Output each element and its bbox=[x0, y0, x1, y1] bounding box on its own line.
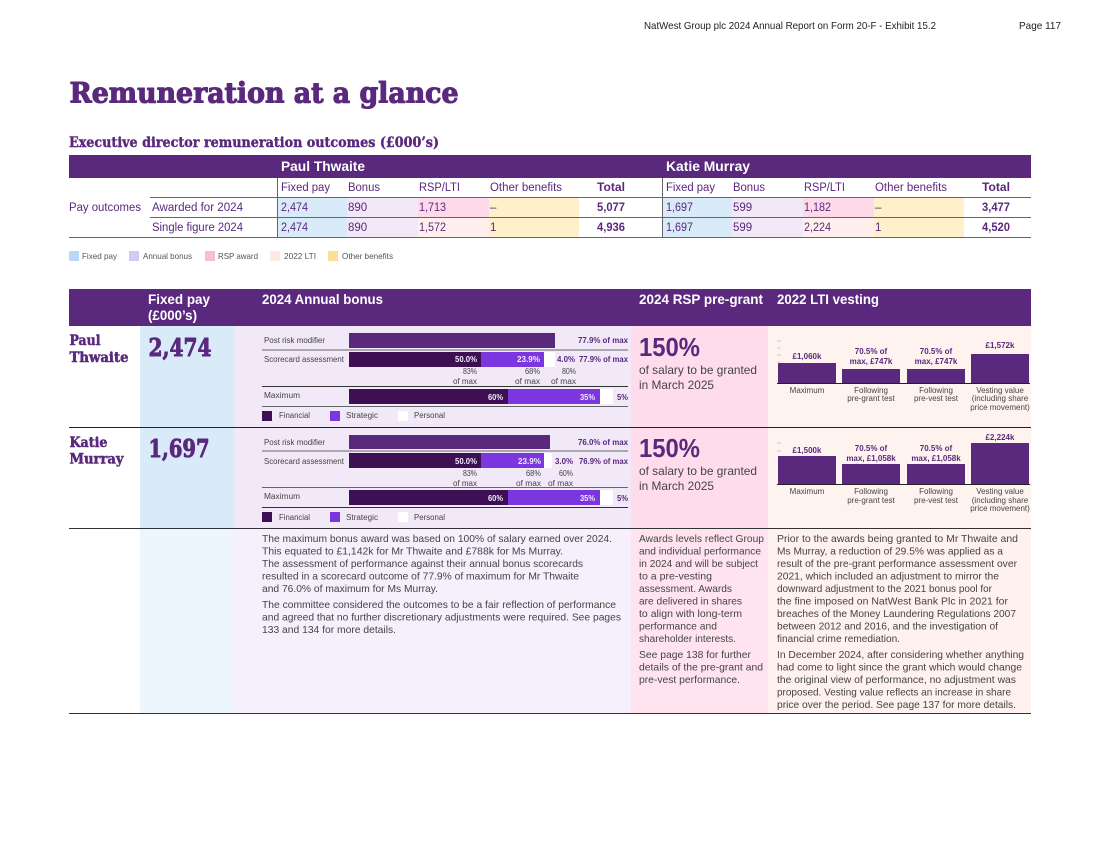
text block: LTI commentary: In December 2024, after considering whether anything bbox=[777, 649, 1024, 661]
column group: Paul Thwaite: – bbox=[490, 202, 497, 214]
column group: Katie Murray: 4,520 bbox=[982, 222, 1010, 234]
LTI bar chart: Paul: Following bbox=[919, 386, 953, 395]
fixed pay value: Paul: 2,474 bbox=[148, 333, 212, 362]
text block: RSP commentary: shareholder interests. bbox=[639, 633, 736, 645]
RSP callout: Paul: 150% bbox=[639, 332, 700, 362]
text block: LTI commentary: had come to light since the grant which would change bbox=[777, 662, 1022, 674]
row: Paul Thwaite name: Thwaite bbox=[70, 350, 129, 366]
text block: RSP commentary bbox=[639, 533, 764, 686]
page header: Page 117 bbox=[1019, 20, 1061, 32]
page header: NatWest Group plc 2024 Annual Report on Form 20-F - Exhibit 15.2 bbox=[644, 20, 936, 32]
LTI bar chart: Katie: Following bbox=[854, 487, 888, 496]
bonus chart: Katie: 60% bbox=[559, 469, 573, 478]
bonus chart: Katie: 76.9% of max bbox=[579, 457, 629, 466]
bonus chart: Paul: Post risk modifier bbox=[264, 336, 325, 345]
bonus chart: Katie: of max bbox=[548, 479, 573, 488]
column group: Katie Murray: 1,697 bbox=[666, 222, 693, 234]
LTI bar chart: Katie: price movement) bbox=[970, 504, 1030, 513]
column group: Paul Thwaite: Bonus bbox=[348, 182, 380, 194]
column group: Paul Thwaite: 2,474 bbox=[281, 202, 309, 214]
LTI bar chart: Paul bbox=[777, 341, 1030, 412]
LTI bar chart: Paul: Maximum bbox=[790, 386, 825, 395]
column group: Katie Murray: – bbox=[875, 202, 882, 214]
column group: Katie Murray: 3,477 bbox=[982, 202, 1010, 214]
column group: Paul Thwaite: 1 bbox=[490, 222, 496, 234]
bonus chart: Paul bbox=[262, 333, 629, 421]
column headings: 2024 RSP pre-grant bbox=[639, 291, 763, 307]
column headings bbox=[148, 291, 879, 323]
column group: Paul Thwaite: RSP/LTI bbox=[419, 182, 460, 194]
legend: pay components bbox=[69, 251, 393, 261]
LTI bar chart: Paul: 70.5% of bbox=[855, 347, 888, 356]
column group: Katie Murray: Total bbox=[982, 182, 1010, 194]
bonus chart: Paul: 23.9% bbox=[517, 355, 540, 364]
bonus chart: Paul: Maximum bbox=[264, 391, 300, 400]
fixed pay value: Katie: 1,697 bbox=[148, 434, 210, 463]
LTI bar chart: Paul: £1,572k bbox=[986, 341, 1015, 350]
column group: Katie Murray: 1 bbox=[875, 222, 881, 234]
LTI bar chart: Katie: £2,224k bbox=[986, 433, 1015, 442]
column headings: 2022 LTI vesting bbox=[777, 291, 879, 307]
column headings: (£000’s) bbox=[148, 307, 197, 323]
text block: RSP commentary: and individual performance bbox=[639, 546, 761, 558]
text block: RSP commentary: to a pre-vesting bbox=[639, 570, 712, 582]
column headings: Fixed pay bbox=[148, 291, 210, 307]
row: Katie Murray name bbox=[70, 435, 124, 468]
bonus chart: Katie: Strategic bbox=[346, 513, 378, 522]
column group: Paul Thwaite: 1,572 bbox=[419, 222, 446, 234]
column group: Paul Thwaite: Fixed pay bbox=[281, 182, 330, 194]
bonus chart: Paul: Financial bbox=[279, 411, 310, 420]
bonus chart: Paul: 83% bbox=[463, 367, 477, 376]
bonus chart: Katie: Financial bbox=[279, 513, 310, 522]
legend: pay components: 2022 LTI bbox=[284, 251, 316, 261]
text block: RSP commentary: in 2024 and will be subject bbox=[639, 558, 758, 570]
RSP callout: Katie: of salary to be granted bbox=[639, 464, 757, 478]
bonus chart: Katie: 3.0% bbox=[555, 457, 573, 466]
text block: LTI commentary: the fine imposed on NatWest Bank Plc in 2021 for bbox=[777, 596, 1008, 608]
text block: bonus commentary: The committee considered the outcomes to be a fair reflection of performance bbox=[262, 599, 616, 611]
title: Remuneration at a glance bbox=[70, 76, 458, 110]
LTI bar chart: Paul: price movement) bbox=[970, 403, 1030, 412]
bonus chart: Katie: of max bbox=[453, 479, 477, 488]
bonus chart: Paul: Scorecard assessment bbox=[264, 355, 345, 364]
legend: pay components: Other benefits bbox=[342, 251, 393, 261]
bonus chart: Paul: Personal bbox=[414, 411, 445, 420]
legend: pay components: RSP award bbox=[218, 251, 258, 261]
bonus chart: Katie: 23.9% bbox=[518, 457, 541, 466]
LTI bar chart: Paul: £1,060k bbox=[793, 352, 822, 361]
LTI bar chart: Katie: max, £1,058k bbox=[846, 454, 896, 463]
text block: RSP commentary: to align with long-term bbox=[639, 608, 742, 620]
column group: Paul Thwaite: Paul Thwaite bbox=[281, 158, 365, 174]
column group: Katie Murray: 2,224 bbox=[804, 222, 832, 234]
RSP callout: Paul: in March 2025 bbox=[639, 378, 714, 392]
column group: Katie Murray: RSP/LTI bbox=[804, 182, 845, 194]
bonus chart: Katie: 83% bbox=[463, 469, 477, 478]
column group: Katie Murray bbox=[666, 158, 1010, 234]
RSP callout: Katie: 150% bbox=[639, 433, 700, 463]
LTI bar chart: Katie bbox=[777, 433, 1030, 513]
LTI bar chart: Katie: (including share bbox=[972, 496, 1029, 505]
row labels bbox=[69, 202, 244, 234]
text block: bonus commentary: and 76.0% of maximum for Ms Murray. bbox=[262, 583, 438, 595]
RSP callout: Paul: of salary to be granted bbox=[639, 363, 757, 377]
column group: Paul Thwaite: 1,713 bbox=[419, 202, 446, 214]
LTI bar chart: Katie: Maximum bbox=[790, 487, 825, 496]
text block: LTI commentary: 2021, which included an adjustment to mirror the bbox=[777, 570, 999, 582]
column group: Paul Thwaite: 890 bbox=[348, 202, 367, 214]
bonus chart: Katie: of max bbox=[516, 479, 541, 488]
text block: bonus commentary: The assessment of performance against their annual bonus scorecards bbox=[262, 558, 583, 570]
column group: Katie Murray: Other benefits bbox=[875, 182, 947, 194]
text block: bonus commentary: This equated to £1,142k for Mr Thwaite and £788k for Ms Murray. bbox=[262, 546, 563, 558]
RSP callout: Katie bbox=[639, 433, 757, 493]
text block: bonus commentary bbox=[262, 533, 621, 636]
bonus chart: Paul: of max bbox=[551, 377, 576, 386]
column group: Katie Murray: 1,182 bbox=[804, 202, 831, 214]
text block: RSP commentary: details of the pre-grant and bbox=[639, 662, 763, 674]
text block: LTI commentary: the original view of performance, no adjustment was bbox=[777, 674, 1016, 686]
column group: Paul Thwaite: 890 bbox=[348, 222, 367, 234]
LTI bar chart: Paul: Vesting value bbox=[976, 386, 1024, 395]
text block: bonus commentary: and agreed that no further discretionary adjustments were required. See pages bbox=[262, 612, 621, 624]
column headings: 2024 Annual bonus bbox=[262, 291, 383, 307]
LTI bar chart: Paul: max, £747k bbox=[850, 357, 893, 366]
LTI bar chart: Katie: pre-vest test bbox=[914, 496, 959, 505]
row: Katie Murray name: Murray bbox=[70, 452, 124, 468]
bonus chart: Paul: 80% bbox=[562, 367, 576, 376]
bonus chart: Paul: of max bbox=[515, 377, 540, 386]
column group: Paul Thwaite: Other benefits bbox=[490, 182, 562, 194]
legend: pay components: Annual bonus bbox=[143, 251, 192, 261]
text block: LTI commentary bbox=[777, 533, 1024, 711]
text block: LTI commentary: result of the pre-grant performance assessment over bbox=[777, 558, 1017, 570]
bonus chart: Katie: Post risk modifier bbox=[264, 438, 325, 447]
bonus chart: Katie: 60% bbox=[488, 494, 503, 503]
column group: Katie Murray: 599 bbox=[733, 222, 752, 234]
text block: LTI commentary: Prior to the awards being granted to Mr Thwaite and bbox=[777, 533, 1018, 545]
bonus chart: Katie: 35% bbox=[580, 494, 595, 503]
text block: RSP commentary: are delivered in shares bbox=[639, 596, 742, 608]
column group: Katie Murray: Bonus bbox=[733, 182, 765, 194]
column group: Paul Thwaite: 2,474 bbox=[281, 222, 309, 234]
LTI bar chart: Paul: (including share bbox=[972, 394, 1029, 403]
RSP callout: Paul bbox=[639, 332, 757, 392]
text block: RSP commentary: pre-vest performance. bbox=[639, 674, 740, 686]
row labels: Single figure 2024 bbox=[152, 222, 244, 234]
bonus chart: Katie: 50.0% bbox=[455, 457, 477, 466]
text block: LTI commentary: Ms Murray, a reduction of 29.5% was applied as a bbox=[777, 546, 1003, 558]
bonus chart: Katie bbox=[262, 435, 629, 522]
LTI bar chart: Paul: 70.5% of bbox=[920, 347, 953, 356]
LTI bar chart: Katie: 70.5% of bbox=[855, 444, 888, 453]
text block: LTI commentary: breaches of the Money Laundering Regulations 2007 bbox=[777, 608, 1016, 620]
LTI bar chart: Katie: max, £1,058k bbox=[911, 454, 961, 463]
column group: Katie Murray: 1,697 bbox=[666, 202, 693, 214]
heading: outcomes table: Executive director remuneration outcomes (£000’s) bbox=[69, 135, 439, 151]
row: Katie Murray name: Katie bbox=[70, 435, 108, 451]
bonus chart: Katie: 68% bbox=[526, 469, 541, 478]
bonus chart: Katie: Personal bbox=[414, 513, 445, 522]
LTI bar chart: Paul: pre-grant test bbox=[847, 394, 896, 403]
LTI bar chart: Katie: Vesting value bbox=[976, 487, 1024, 496]
column group: Katie Murray: Fixed pay bbox=[666, 182, 715, 194]
row: Paul Thwaite name bbox=[70, 333, 129, 366]
text block: LTI commentary: proposed. Vesting value reflects an increase in share bbox=[777, 686, 1011, 698]
bonus chart: Paul: 50.0% bbox=[455, 355, 477, 364]
text block: RSP commentary: performance and bbox=[639, 620, 717, 632]
LTI bar chart: Katie: £1,500k bbox=[793, 446, 822, 455]
bonus chart: Paul: 60% bbox=[488, 393, 503, 402]
bonus chart: Paul: 5% bbox=[617, 393, 628, 402]
LTI bar chart: Paul: Following bbox=[854, 386, 888, 395]
column group: Katie Murray: 599 bbox=[733, 202, 752, 214]
row: Paul Thwaite name: Paul bbox=[70, 333, 100, 349]
row labels: Awarded for 2024 bbox=[152, 202, 244, 214]
text block: bonus commentary: 133 and 134 for more details. bbox=[262, 624, 396, 636]
panel: outcomes table bbox=[69, 155, 1031, 238]
text block: bonus commentary: The maximum bonus award was based on 100% of salary earned over 2024. bbox=[262, 533, 612, 545]
bonus chart: Katie: Maximum bbox=[264, 492, 300, 501]
bonus chart: Katie: 5% bbox=[617, 494, 628, 503]
bonus chart: Paul: 35% bbox=[580, 393, 595, 402]
column group: Paul Thwaite bbox=[281, 158, 625, 234]
column group: Katie Murray: Katie Murray bbox=[666, 158, 750, 174]
column group: Paul Thwaite: Total bbox=[597, 182, 625, 194]
LTI bar chart: Katie: 70.5% of bbox=[920, 444, 953, 453]
panel: detail table background bbox=[69, 289, 1031, 714]
bonus chart: Katie: Scorecard assessment bbox=[264, 457, 345, 466]
bonus chart: Paul: of max bbox=[453, 377, 477, 386]
LTI bar chart: Paul: max, £747k bbox=[915, 357, 958, 366]
text block: LTI commentary: between 2012 and 2016, and the investigation of bbox=[777, 620, 998, 632]
LTI bar chart: Katie: Following bbox=[919, 487, 953, 496]
text block: bonus commentary: resulted in a scorecard outcome of 77.9% of maximum for Mr Thwaite bbox=[262, 570, 579, 582]
bonus chart: Paul: 77.9% of max bbox=[578, 336, 629, 345]
bonus chart: Paul: Strategic bbox=[346, 411, 378, 420]
text block: RSP commentary: Awards levels reflect Group bbox=[639, 533, 764, 545]
text block: LTI commentary: downward adjustment to the 2021 bonus pool for bbox=[777, 583, 992, 595]
legend: pay components: Fixed pay bbox=[82, 251, 118, 261]
LTI bar chart: Katie: pre-grant test bbox=[847, 496, 896, 505]
LTI bar chart: Paul: pre-vest test bbox=[914, 394, 959, 403]
column group: Paul Thwaite: 4,936 bbox=[597, 222, 625, 234]
RSP callout: Katie: in March 2025 bbox=[639, 479, 714, 493]
bonus chart: Katie: 76.0% of max bbox=[578, 438, 629, 447]
row labels: Pay outcomes bbox=[69, 202, 141, 214]
text block: LTI commentary: price over the period. See page 137 for more details. bbox=[777, 699, 1016, 711]
column group: Paul Thwaite: 5,077 bbox=[597, 202, 625, 214]
text block: RSP commentary: assessment. Awards bbox=[639, 583, 732, 595]
bonus chart: Paul: 77.9% of max bbox=[579, 355, 629, 364]
bonus chart: Paul: 68% bbox=[525, 367, 540, 376]
text block: LTI commentary: financial crime remediation. bbox=[777, 633, 900, 645]
text block: RSP commentary: See page 138 for further bbox=[639, 649, 751, 661]
bonus chart: Paul: 4.0% bbox=[557, 355, 575, 364]
